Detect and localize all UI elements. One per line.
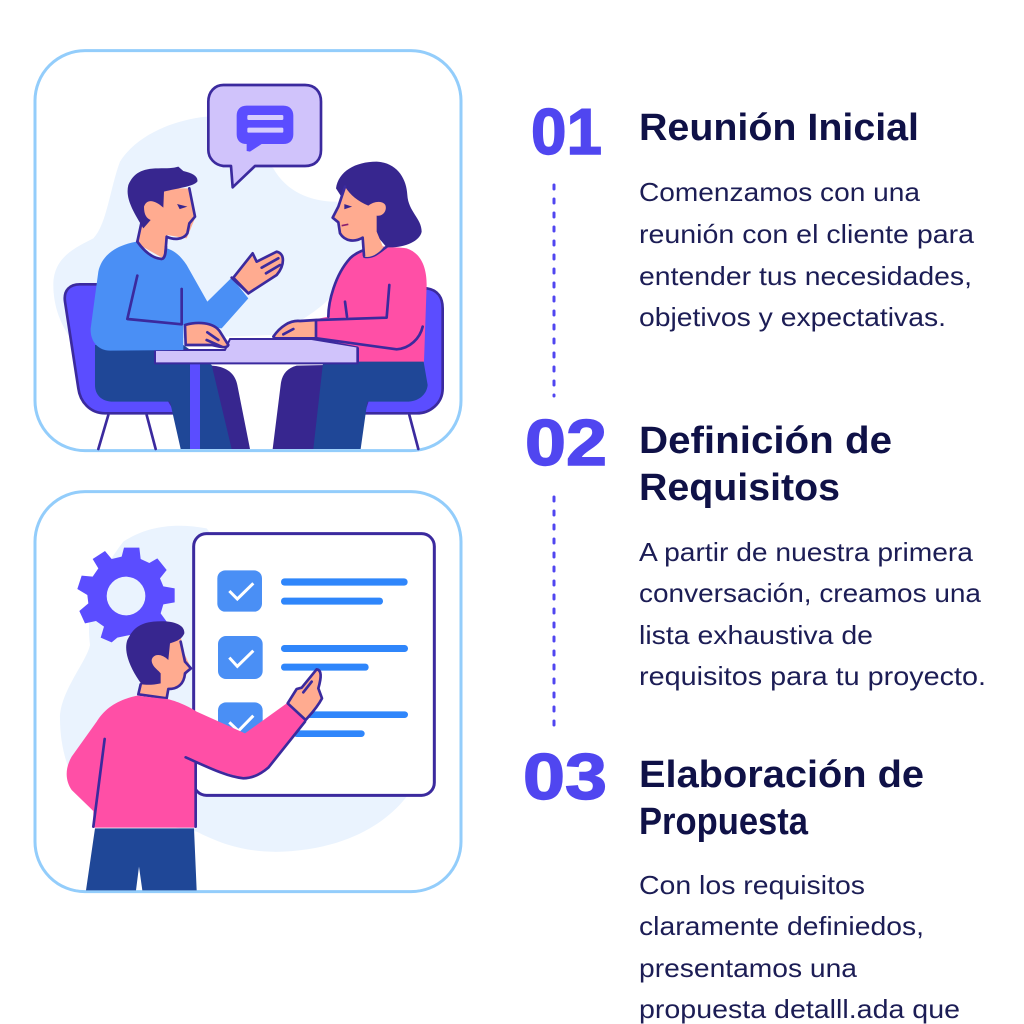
man — [91, 167, 283, 351]
panel: meeting illustration — [35, 51, 461, 451]
step 2 text: A partir de nuestra primera — [639, 537, 974, 567]
step 1 heading: Reunión Inicial — [639, 107, 919, 149]
step 3 text: propuesta detalll.ada que — [639, 994, 960, 1024]
step 1 connector — [552, 185, 556, 396]
step 3 text: claramente definiedos, — [639, 911, 924, 941]
speech bubble — [208, 85, 321, 187]
item 3 — [218, 702, 408, 745]
panel: requirements illustration — [35, 492, 461, 892]
icon: chat — [237, 106, 293, 152]
step 2 connector — [552, 497, 556, 726]
step 1 text — [639, 177, 975, 332]
item 1 — [217, 570, 408, 612]
checklist board — [194, 534, 434, 795]
step 2 heading: Requisitos — [639, 467, 840, 509]
step 3 heading: Elaboración de — [639, 754, 924, 796]
step 1 text: objetivos y expectativas. — [639, 302, 946, 332]
step 2 number: 02 — [525, 406, 607, 479]
item 2 — [218, 636, 408, 679]
step 3 heading — [639, 754, 924, 843]
step 1 text: entender tus necesidades, — [639, 261, 972, 291]
step 1 text: reunión con el cliente para — [639, 219, 975, 249]
step 3 heading: Propuesta — [639, 801, 809, 843]
step 2 heading: Definición de — [639, 420, 892, 462]
right chair — [363, 288, 443, 449]
icon: gear — [77, 548, 175, 642]
table top — [155, 339, 358, 363]
step 1 number: 01 — [531, 95, 602, 168]
woman — [273, 162, 427, 362]
step 2 text: conversación, creamos una — [639, 578, 982, 608]
step 3 text: Con los requisitos — [639, 870, 865, 900]
step 3 text: presentamos una — [639, 953, 858, 983]
step 3 number: 03 — [523, 740, 607, 813]
left chair — [65, 284, 177, 449]
step 2 text: requisitos para tu proyecto. — [639, 661, 986, 691]
step 1 text: Comenzamos con una — [639, 177, 921, 207]
man's legs — [95, 345, 250, 449]
woman's legs — [273, 360, 428, 449]
person — [67, 621, 322, 890]
step 2 heading — [639, 420, 892, 509]
step 3 text — [639, 870, 960, 1024]
step 2 text — [639, 537, 986, 691]
table leg — [190, 363, 200, 449]
step 2 text: lista exhaustiva de — [639, 620, 873, 650]
